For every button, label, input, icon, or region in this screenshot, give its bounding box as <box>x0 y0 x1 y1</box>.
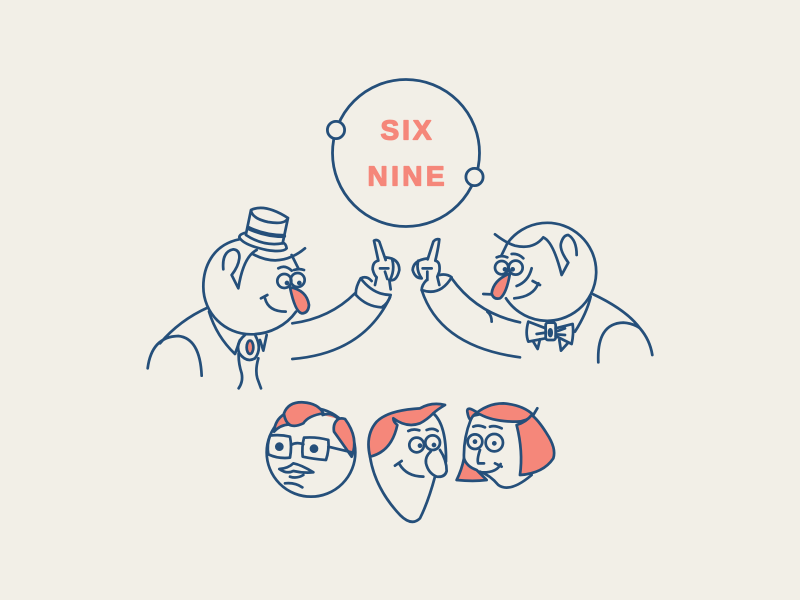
head <box>506 223 596 321</box>
hair and ear <box>495 234 577 275</box>
nose <box>492 273 510 299</box>
left man with top hat <box>148 208 391 388</box>
right man with bow tie <box>422 223 652 362</box>
smile <box>514 268 540 298</box>
collar and tie <box>209 312 267 388</box>
three faces <box>267 402 554 522</box>
glasses <box>268 435 352 460</box>
sign: six nine circle <box>327 80 483 226</box>
text: NINE: NINE <box>368 160 444 192</box>
face: man with long nose <box>368 404 447 522</box>
smile <box>261 295 286 312</box>
hair and ear <box>223 248 305 288</box>
eyes <box>495 254 523 275</box>
bow tie <box>527 322 573 351</box>
right hand <box>413 239 440 285</box>
eyes <box>277 267 305 288</box>
text: SIX: SIX <box>380 114 432 146</box>
face: woman with bob <box>457 403 554 488</box>
top hat <box>239 208 288 251</box>
body and arm <box>148 293 390 376</box>
nose <box>290 287 309 313</box>
face: man with glasses <box>267 402 355 497</box>
head <box>203 239 296 334</box>
moustache <box>279 463 313 487</box>
cuff <box>422 275 452 292</box>
cuff <box>356 277 391 307</box>
left hand <box>373 240 399 289</box>
body and arm <box>422 278 652 362</box>
hair <box>284 402 323 426</box>
